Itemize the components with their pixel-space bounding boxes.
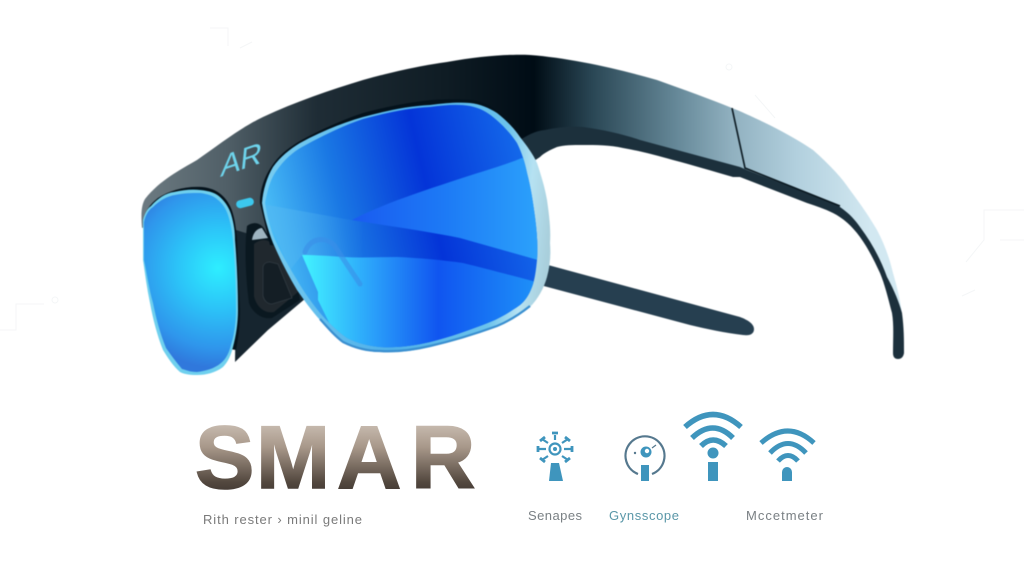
title: SMAR: SMAR — [195, 407, 475, 507]
temple hinge seam — [732, 108, 840, 206]
icon: wifi signal accelerometer — [761, 431, 814, 481]
icon: wifi signal tall — [685, 414, 741, 481]
label: Senapes: Senapes — [528, 508, 582, 523]
lower temple strip — [520, 127, 904, 359]
right lens — [260, 99, 550, 355]
label: Gynsscope: Gynsscope — [609, 508, 679, 523]
subtitle: Rith rester › minil geline — [203, 512, 362, 527]
nose bridge block — [232, 205, 306, 362]
nose pad — [246, 223, 300, 318]
main frame and temple — [141, 55, 902, 313]
AR logo: AR — [219, 135, 264, 184]
lens reflections — [262, 158, 545, 355]
bridge LED — [235, 197, 255, 209]
icon: sensor — [538, 433, 572, 481]
left lens — [143, 187, 240, 375]
label: Mccetmeter: Mccetmeter — [746, 508, 824, 523]
lens bottom rim shading — [320, 306, 530, 351]
smart glasses illustration — [141, 55, 904, 375]
icon: gyroscope — [626, 436, 664, 481]
back temple arm — [540, 265, 754, 335]
faint background circuit lines — [0, 28, 1024, 330]
